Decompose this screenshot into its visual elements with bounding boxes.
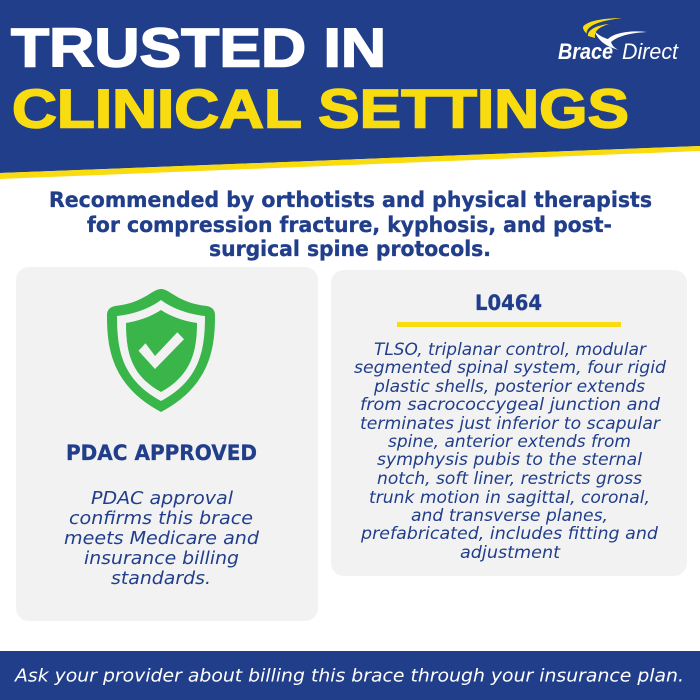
text: PDAC description [64,488,260,589]
text: L0464 description: segmented spinal system, four rigid [354,358,666,378]
subtitle [49,188,652,261]
text: PDAC description: standards. [111,568,211,589]
logo: Brace Direct: Direct [622,39,679,64]
text: L0464 description: plastic shells, posterior extends [373,377,645,397]
text: L0464 description: trunk motion in sagittal, coronal, [369,488,650,508]
text: L0464 description: TLSO, triplanar control, modular [374,340,647,360]
text: L0464 description [354,340,666,563]
text: L0464 description: prefabricated, includes fitting and [360,524,658,544]
text: PDAC description: meets Medicare and [64,528,260,549]
heading: L0464: L0464 [475,291,542,315]
panel: L0464 code [331,270,687,576]
text: L0464 description: symphysis pubis to the sternal [377,450,642,470]
logo: Brace Direct [558,18,679,64]
text: L0464 description: terminates just inferior to scapular [360,414,661,434]
title: TRUSTED IN [11,16,386,78]
text: PDAC description: insurance billing [84,548,239,569]
text: L0464 description: from sacrococcygeal junction and [360,395,660,415]
text: L0464 description: spine, anterior extends from [388,432,631,452]
text: L0464 description: and transverse planes, [411,506,608,526]
icon: green shield with check [107,289,215,412]
title: CLINICAL SETTINGS [12,78,629,140]
footer banner [0,651,700,700]
header band [0,0,700,179]
subtitle: Recommended by orthotists and physical therapists [49,188,652,212]
subtitle: for compression fracture, kyphosis, and post- [87,213,612,237]
text: L0464 description: notch, soft liner, restricts gross [377,469,642,489]
text: PDAC description: confirms this brace [69,508,253,529]
footer banner: Ask your provider about billing this brace through your insurance plan. [14,666,684,686]
logo: Brace Direct: Brace [558,39,613,64]
panel: PDAC approved [16,267,318,621]
text: PDAC description: PDAC approval [91,488,233,509]
subtitle: surgical spine protocols. [209,237,491,261]
text: L0464 description: adjustment [460,543,561,563]
title [11,16,629,140]
heading: PDAC approved: PDAC APPROVED [66,441,257,465]
